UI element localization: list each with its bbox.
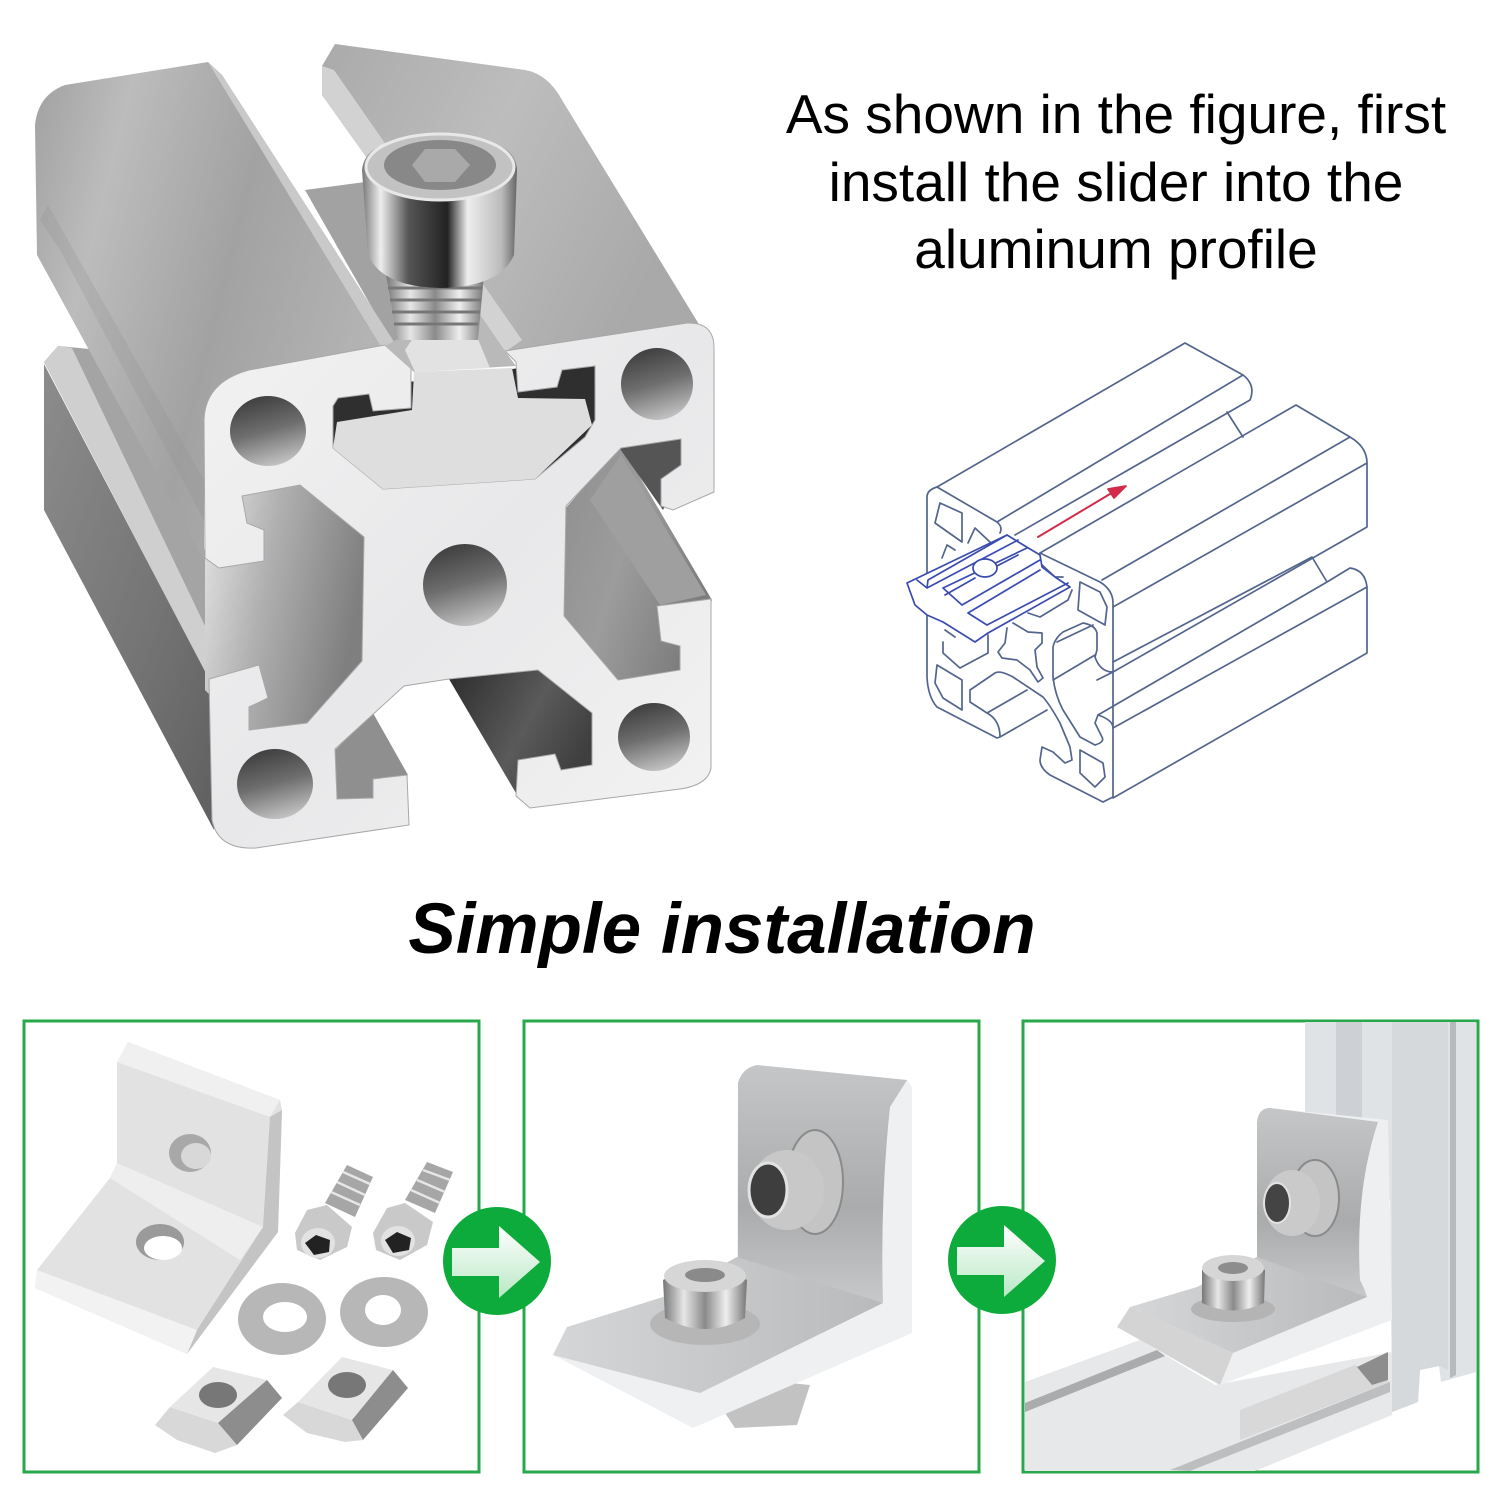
description text: install the slider into the [829,151,1403,213]
screw [362,134,517,340]
diagram center web [942,528,1043,682]
diagram end profile [927,487,1113,802]
screws [295,1162,453,1260]
panel: bracket on frame [1023,1021,1478,1472]
slot interiors [205,358,712,802]
heading: Simple installation [408,890,1036,969]
screws [650,1130,843,1345]
photo: aluminium profile with slider [35,44,714,848]
panel: bracket fastened [524,1021,979,1472]
frame upright [1305,1022,1476,1412]
diagram top rails [937,343,1367,672]
bracket [553,1065,912,1428]
description text [786,83,1446,280]
profile slot floor [305,182,490,348]
frame rail [1025,1340,1392,1471]
diagram corner cavities [935,503,1107,787]
description text: aluminum profile [914,218,1318,280]
profile upper right rail [322,44,700,352]
washers [238,1277,428,1355]
diagram: slider insertion line drawing [907,343,1367,802]
profile upper left rail [35,62,398,560]
arrow: step 2 to step 3 [948,1206,1056,1314]
panel: parts kit [24,1021,479,1472]
description text: As shown in the figure, first [786,83,1446,145]
red direction arrow [1038,486,1126,537]
bracket [35,1042,282,1354]
round holes [230,348,693,819]
profile lower left rail [44,346,265,830]
arrow: step 1 to step 2 [443,1207,551,1315]
T nuts [155,1357,408,1453]
diagram lower rail [1097,557,1367,798]
bracket [1117,1108,1392,1385]
diagram slider [907,535,1070,642]
front face [204,323,714,848]
screws [1191,1160,1339,1322]
slider in slot [333,300,592,489]
